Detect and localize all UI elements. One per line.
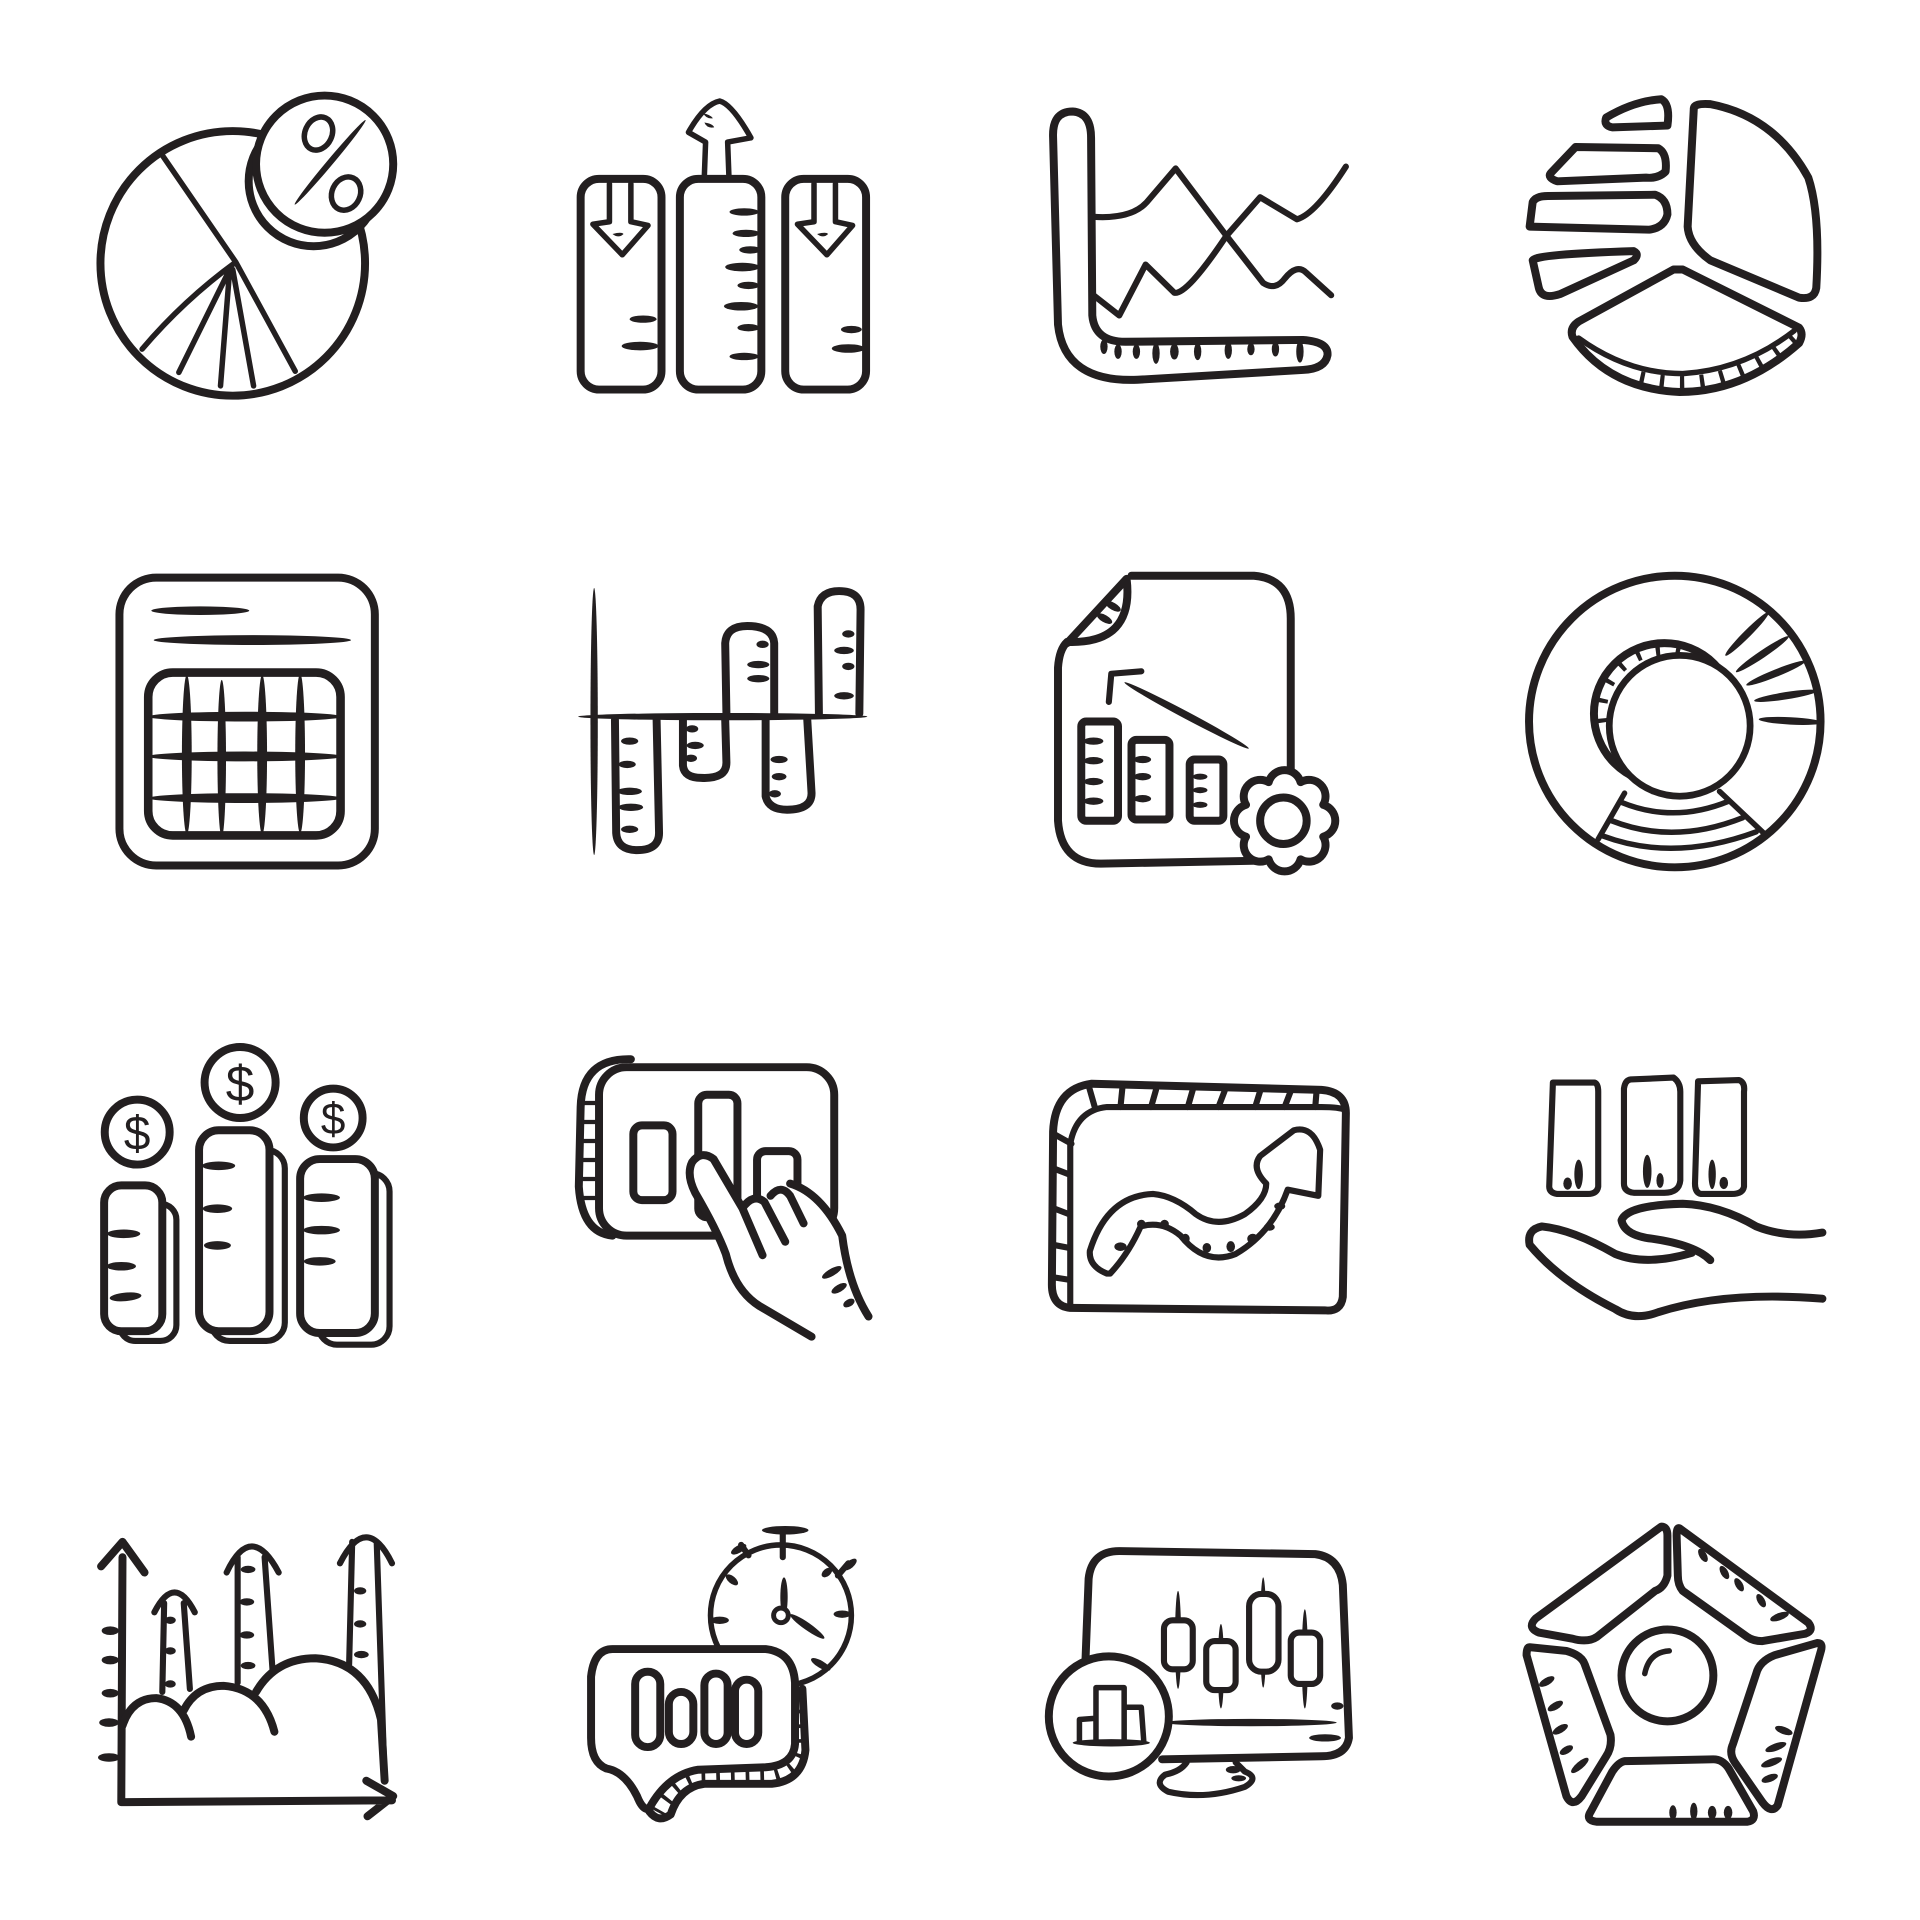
bar chart badge <box>1049 1656 1169 1776</box>
document bars <box>1081 722 1223 821</box>
icon: dollar coins over stacked bars <box>104 1047 390 1345</box>
frame dashes <box>1053 1086 1316 1280</box>
dollar coins: $ <box>321 1095 345 1144</box>
icon: tablet with rising curve arrow <box>1052 1084 1346 1311</box>
right wedge lines <box>1723 610 1823 726</box>
candlesticks <box>1164 1577 1320 1708</box>
icon: pie chart with percent coin <box>100 96 393 396</box>
icon: positive and negative bar chart <box>578 588 867 855</box>
icon: growth arrows over cloud <box>98 1537 393 1816</box>
right slice <box>1688 104 1817 298</box>
bottom wedge arcs <box>1598 791 1764 848</box>
table header lines <box>151 606 351 645</box>
downward trend arrow <box>1109 671 1251 752</box>
dollar coins <box>105 1047 363 1165</box>
bottom slice <box>1572 270 1802 392</box>
icon: exploded pie chart <box>1530 99 1817 392</box>
fold ticks <box>1095 599 1122 626</box>
trend lines <box>1094 167 1346 236</box>
bar ticks <box>612 113 865 360</box>
down arrows <box>593 184 853 255</box>
inner disc <box>1609 655 1750 796</box>
icon: stopwatch with chart speech bubble <box>591 1526 859 1818</box>
curved arrow <box>1090 1129 1320 1274</box>
screen <box>579 1059 834 1236</box>
percent coin <box>249 96 393 246</box>
ticks on inner ring <box>1601 649 1713 723</box>
monitor stand <box>1160 1762 1252 1795</box>
pentagon panels <box>1527 1527 1822 1822</box>
arrow ticks <box>165 1566 369 1688</box>
axes <box>101 1542 393 1816</box>
panel ticks <box>1538 1547 1794 1820</box>
bar ticks <box>107 1162 340 1303</box>
icon: monitor with candlestick chart <box>1049 1551 1349 1795</box>
icon: pentagon segment chart <box>1527 1527 1822 1822</box>
inner frame <box>1070 1107 1346 1304</box>
screen details <box>1165 1702 1343 1781</box>
curve ticks <box>1114 1203 1285 1253</box>
rim inner line <box>1579 331 1794 374</box>
icon: donut chart <box>1529 576 1823 867</box>
table grid <box>148 674 342 837</box>
icon: data table <box>119 578 375 865</box>
stacked bars <box>104 1130 390 1345</box>
open hand <box>1529 1204 1822 1316</box>
axes <box>578 588 867 855</box>
axis ticks <box>1100 339 1304 364</box>
icon: three bars with up and down arrows <box>581 101 866 390</box>
y ticks <box>98 1626 120 1762</box>
icon: hand pressing chart screen <box>579 1059 869 1337</box>
stopwatch <box>710 1526 859 1686</box>
icon: document report with gear <box>1058 576 1335 871</box>
chart ticks <box>617 630 854 833</box>
icon: line chart on L-shaped axes <box>1053 111 1346 380</box>
bars <box>1549 1078 1744 1194</box>
hand <box>690 1155 869 1337</box>
icon: hand holding three bars <box>1529 1078 1822 1316</box>
rim dashes <box>1640 337 1794 383</box>
bubble bars <box>635 1672 758 1747</box>
dollar coins: $ <box>226 1054 254 1112</box>
left bars <box>1530 99 1668 296</box>
gear <box>1234 770 1335 871</box>
up arrow <box>688 101 751 175</box>
cloud <box>122 1658 385 1781</box>
speech bubble <box>591 1649 795 1809</box>
bubble shadow <box>649 1689 805 1818</box>
dollar coins: $ <box>124 1107 150 1160</box>
rising arrows <box>154 1537 392 1781</box>
center circle <box>1622 1629 1713 1721</box>
